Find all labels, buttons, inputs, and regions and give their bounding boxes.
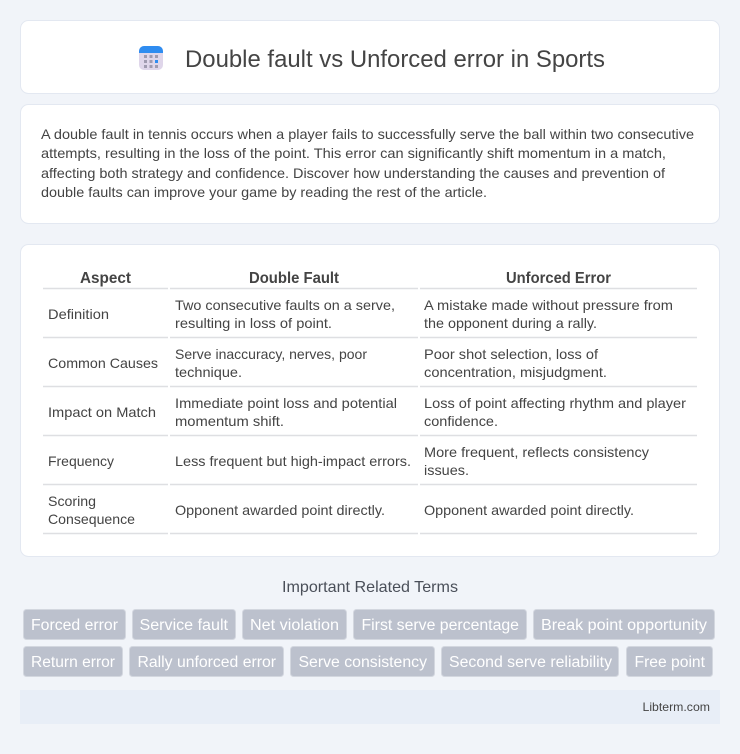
table row: definition: Two consecutive faults on a serve, xyxy=(175,297,395,313)
text block: introduction paragraph xyxy=(41,126,694,200)
related term tags: Service fault xyxy=(140,617,229,634)
related term tags: First serve percentage xyxy=(362,617,519,634)
table row: impact on match xyxy=(48,395,686,429)
table row: common causes: technique. xyxy=(175,364,242,380)
table row: scoring consequence: Opponent awarded point directly. xyxy=(424,502,634,518)
related term tags: Forced error xyxy=(31,617,118,634)
related term tags: Net violation xyxy=(250,617,339,634)
text block: introduction paragraph: double faults can improve your game by reading the rest of the article. xyxy=(41,184,487,200)
related term tags: Serve consistency xyxy=(298,654,427,671)
table row: frequency: Less frequent but high-impact errors. xyxy=(175,453,411,469)
related term tags: Rally unforced error xyxy=(138,654,276,671)
footer credit: Libterm.com xyxy=(642,700,710,714)
table row: definition: A mistake made without pressure from xyxy=(424,297,673,313)
icon: calendar xyxy=(139,46,163,70)
table row: impact on match: Loss of point affecting rhythm and player xyxy=(424,395,686,411)
related term tags: Second serve reliability xyxy=(449,654,612,671)
table row: frequency: issues. xyxy=(424,462,469,478)
table row: scoring consequence: Scoring xyxy=(48,493,96,509)
text block: introduction paragraph: affecting both strategy and confidence. Discover how understanding the causes and prevention of xyxy=(41,165,665,181)
table row: frequency xyxy=(48,444,649,478)
table row: common causes: Common Causes xyxy=(48,355,158,371)
table row: definition: resulting in loss of point. xyxy=(175,315,332,331)
heading: important related terms: Important Related Terms xyxy=(282,579,458,596)
table row: scoring consequence xyxy=(48,493,634,527)
panel: comparison table xyxy=(20,244,720,556)
table row: impact on match: Immediate point loss and potential xyxy=(175,395,397,411)
table row: definition: the opponent during a rally. xyxy=(424,315,597,331)
table row: scoring consequence: Opponent awarded point directly. xyxy=(175,502,385,518)
related term tags: Return error xyxy=(31,654,115,671)
related term tags xyxy=(24,610,714,676)
table row: common causes xyxy=(48,346,607,380)
table row: frequency: More frequent, reflects consistency xyxy=(424,444,649,460)
table row: common causes: Serve inaccuracy, nerves, poor xyxy=(175,346,367,362)
related term tags: Break point opportunity xyxy=(541,617,707,634)
table row: definition xyxy=(48,297,673,331)
title: Double fault vs Unforced error in Sports xyxy=(185,46,605,73)
table header: Double Fault xyxy=(249,270,340,287)
text block: introduction paragraph: attempts, resulting in the loss of the point. This error can significantly shift momentum in a match, xyxy=(41,145,666,161)
table header: Unforced Error xyxy=(506,270,611,287)
table row: impact on match: Impact on Match xyxy=(48,404,156,420)
table row: impact on match: confidence. xyxy=(424,413,498,429)
text block: introduction paragraph: A double fault in tennis occurs when a player fails to successfully serve the ball within two consecutive xyxy=(41,126,694,142)
table row: definition: Definition xyxy=(48,306,109,322)
table header: Aspect xyxy=(80,270,132,287)
table row: frequency: Frequency xyxy=(48,453,114,469)
table row: impact on match: momentum shift. xyxy=(175,413,284,429)
panel: title card xyxy=(20,20,720,94)
panel: introduction xyxy=(20,104,720,224)
table row: common causes: Poor shot selection, loss of xyxy=(424,346,598,362)
table row: scoring consequence: Consequence xyxy=(48,511,135,527)
footer xyxy=(20,690,720,724)
table row: common causes: concentration, misjudgment. xyxy=(424,364,607,380)
table header xyxy=(80,270,611,287)
related term tags: Free point xyxy=(634,654,706,671)
